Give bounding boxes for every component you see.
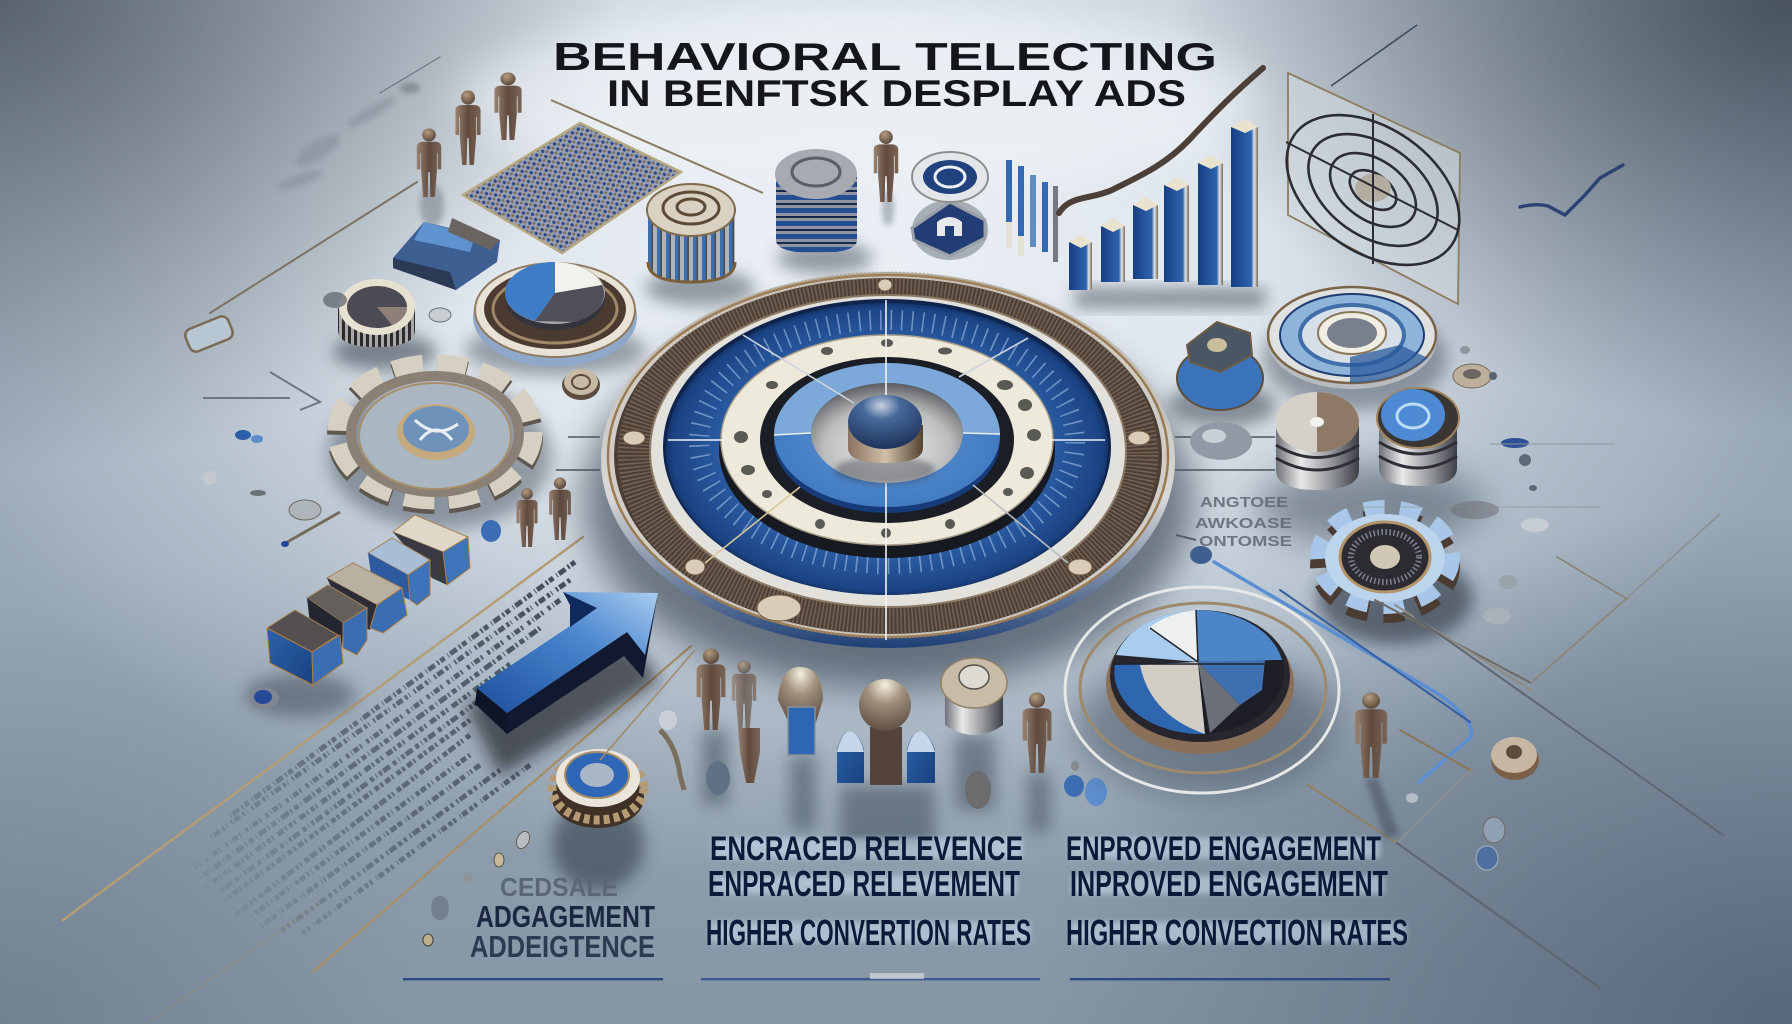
rising trend swoosh — [1059, 68, 1263, 213]
block 2 — [307, 585, 367, 655]
label column: left: CEDSALE — [500, 872, 618, 902]
small gear with blue medallion — [552, 749, 644, 891]
blue segmented ring — [774, 363, 1000, 513]
footer rules — [403, 973, 1390, 980]
bar 4 — [1164, 177, 1189, 282]
shadow pool under stacks — [1255, 465, 1485, 545]
person 8 — [732, 660, 756, 728]
diagonal guide lines, left — [63, 57, 691, 1023]
label column: left: ADGAGEMENT — [476, 899, 655, 934]
round and hexagon badges — [912, 152, 988, 260]
people figures, upper left — [417, 72, 522, 227]
icon: pill tag — [183, 314, 235, 354]
block 3 — [327, 563, 407, 633]
bar 3 — [1133, 197, 1158, 279]
capped pillar — [778, 667, 823, 755]
blue small capsule — [481, 520, 501, 542]
label column: centre: ENCRACED RELEVENCE — [710, 830, 1023, 868]
pie button on ringed base, left — [465, 262, 645, 376]
soft central highlight — [460, 10, 1260, 190]
sketch smudges, upper left — [275, 83, 420, 194]
pale glow behind labels — [710, 838, 1406, 942]
cream ring — [719, 335, 1055, 558]
bronze washer icon — [1491, 737, 1539, 780]
label column: left: ADDEIGTENCE — [470, 929, 655, 964]
bar 6 — [1231, 119, 1258, 287]
ridged drum icon — [645, 184, 755, 306]
dark inner channel — [760, 357, 1014, 523]
staircase blocks — [245, 515, 470, 717]
centre hole — [811, 383, 963, 483]
faceted blue jar — [1168, 322, 1276, 427]
bar 2 — [1101, 218, 1125, 282]
small coins, lower right — [1406, 793, 1505, 870]
blue and steel connector lines, right — [1214, 514, 1723, 988]
blue dial disk — [663, 299, 1111, 595]
label column: right: ENPROVED ENGAGEMENT — [1066, 830, 1381, 868]
bar 1 — [1069, 235, 1092, 290]
block 4 — [368, 538, 430, 605]
cylinder with lid — [941, 658, 1007, 735]
stacked discs, right stack — [1377, 388, 1459, 486]
label column: centre: HIGHER CONVERTION RATES — [706, 912, 1031, 953]
label column: left — [470, 872, 655, 964]
title — [553, 36, 1217, 114]
block 5 — [393, 515, 470, 585]
connector stubs around dial — [556, 437, 1275, 470]
bar 5 — [1198, 155, 1223, 285]
label column: right: INPROVED ENGAGEMENT — [1070, 863, 1388, 904]
stacked discs, left stack — [1275, 392, 1359, 490]
small parts, right — [1300, 346, 1615, 624]
person, lower right — [1355, 692, 1400, 838]
symbols on cream ring — [734, 339, 1041, 538]
outer rim — [601, 272, 1175, 648]
block 1 — [267, 610, 343, 685]
main target dial — [583, 272, 1193, 688]
large silver gear, left — [328, 364, 552, 529]
radial division lines — [668, 300, 1105, 640]
mesh band — [614, 278, 1162, 634]
blue gear, right — [1317, 510, 1473, 644]
title: IN BENFTSK DESPLAY ADS — [607, 73, 1186, 114]
small trinkets under podium row — [706, 761, 1107, 809]
people figures, beside gear — [516, 477, 571, 547]
label column: right — [1066, 830, 1408, 953]
blue gem box, left — [393, 218, 500, 290]
small parts near gear — [423, 650, 695, 946]
small blue tag — [1176, 535, 1212, 564]
icon: trend squiggle — [1520, 165, 1623, 215]
silver inner ring — [650, 295, 1126, 607]
label column: right: HIGHER CONVECTION RATES — [1066, 912, 1408, 953]
small text block — [1195, 494, 1292, 550]
rising arrow — [465, 592, 660, 775]
person, top centre — [874, 130, 898, 226]
icon: blue gem, lower left — [249, 687, 279, 709]
podium with sphere — [837, 679, 935, 785]
small text block: AWKOASE — [1195, 515, 1292, 532]
small ridged drum, left — [333, 279, 437, 370]
person 10 — [1023, 692, 1051, 773]
people and podium row, bottom centre — [697, 648, 1051, 850]
stream of small text rows under the arrow — [195, 562, 575, 935]
disc with concentric blue rings, right — [1263, 287, 1447, 410]
glass blob beside dial — [1190, 422, 1252, 460]
target diagram panel — [1259, 25, 1487, 304]
small text block: ONTOMSE — [1199, 533, 1292, 550]
thin bars chart — [1006, 160, 1058, 262]
centre ball on bronze base — [835, 395, 935, 484]
small text block: ANGTOEE — [1200, 494, 1288, 511]
bar chart — [1069, 119, 1265, 308]
person 7 — [697, 648, 725, 730]
person 9 lower — [738, 728, 760, 783]
pie chart dome, lower right — [1065, 587, 1339, 795]
scattered small parts, left — [203, 292, 451, 547]
label column: centre — [706, 830, 1031, 953]
rim knobs — [623, 279, 1150, 621]
blue layered stack icon — [775, 149, 873, 274]
small coin, left — [562, 369, 600, 400]
data matrix card — [463, 100, 763, 253]
label column: centre: ENPRACED RELEVEMENT — [708, 863, 1020, 904]
title: BEHAVIORAL TELECTING — [553, 36, 1217, 79]
